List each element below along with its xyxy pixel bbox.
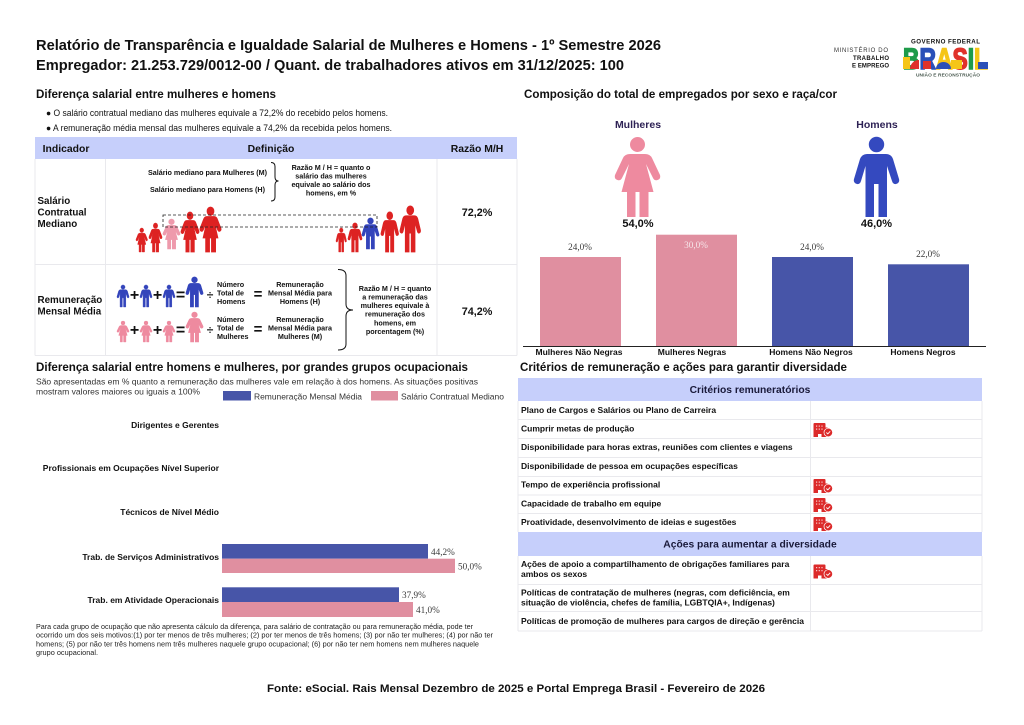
panel: ações diversidade: situação de violência, chefes de família, LGBTQIA+, Indígenas) [521, 598, 775, 608]
panel: composição homens: Homens [856, 119, 898, 131]
panel: ações diversidade: Políticas de contratação de mulheres (negras, com deficiência, em [521, 588, 790, 598]
bar chart: grupos ocupacionais: Dirigentes e Gerentes [131, 420, 219, 430]
row: remuneração mensal média: 74,2% [462, 306, 493, 318]
row: salário contratual mediano: Mediano [38, 219, 77, 230]
bullet list [46, 108, 392, 133]
bar chart: grupos ocupacionais: Trab. de Serviços Administrativos [82, 552, 219, 562]
fórmula homens: Homens [217, 297, 245, 306]
text block: explicação: São apresentadas em % quanto a remuneração das mulheres vale em relação à dos homens. As situações positivas [36, 376, 478, 386]
title: Relatório de Transparência e Igualdade Salarial de Mulheres e Homens - 1º Semestre 2026 [36, 37, 661, 54]
text block: nota de rodapé [36, 622, 494, 657]
fórmula mulheres: Mulheres (M) [278, 332, 323, 341]
bar chart: raça/cor: 24,0% [568, 242, 592, 252]
row: salário contratual mediano [38, 196, 493, 230]
heading: grandes grupos: Diferença salarial entre homens e mulheres, por grandes grupos ocupacionais [36, 360, 468, 374]
panel: critérios remuneratórios: Disponibilidade de pessoa em ocupações específicas [521, 461, 738, 471]
bar chart: grupos ocupacionais [43, 420, 482, 617]
panel: critérios remuneratórios: Capacidade de trabalho em equipe [521, 498, 662, 508]
text block: explicação: mostram valores maiores ou iguais a 100% [36, 386, 200, 396]
fórmula mulheres: + [153, 322, 162, 339]
fórmula mulheres [117, 312, 333, 342]
row: salário contratual mediano: Contratual [38, 208, 87, 218]
bar chart: raça/cor [523, 235, 986, 357]
bar chart: grupos ocupacionais: Profissionais em Ocupações Nível Superior [43, 463, 220, 473]
table header: Razão M/H [451, 144, 503, 155]
text block: nota de rodapé: Para cada grupo de ocupação que não apresenta cálculo da diferença, para salário de contratação ou para remuneração média, pode ter [36, 622, 474, 631]
table header [43, 144, 503, 155]
bar chart: raça/cor: Homens Não Negros [769, 347, 853, 357]
definição salário mediano: Salário mediano para Mulheres (M) [148, 168, 268, 177]
fórmula mulheres: = [176, 322, 185, 339]
panel: ações diversidade: Ações de apoio a compartilhamento de obrigações familiares para [521, 559, 790, 569]
fórmula homens: Número [217, 280, 245, 289]
row: salário contratual mediano: Salário [38, 196, 70, 207]
bar chart: grupos ocupacionais: 50,0% [458, 562, 482, 572]
logo: ministério e governo federal: BRASIL [903, 43, 988, 76]
bar chart: raça/cor: Mulheres Não Negras [536, 347, 623, 357]
chave e razão remuneração: remuneração dos [365, 310, 425, 318]
fórmula homens: ÷ [207, 288, 214, 302]
logo: ministério e governo federal [834, 38, 988, 78]
fórmula homens [117, 277, 333, 307]
logo: ministério e governo federal: MINISTÉRIO DO [834, 47, 888, 54]
fórmula mulheres: Mulheres [217, 332, 249, 341]
fórmula mulheres: Remuneração [276, 315, 324, 324]
bar chart: grupos ocupacionais: 41,0% [416, 605, 440, 615]
panel: critérios remuneratórios: Cumprir metas de produção [521, 424, 634, 434]
fórmula homens: + [130, 287, 139, 304]
bar chart: grupos ocupacionais: Trab. em Atividade Operacionais [88, 595, 219, 605]
bar chart: raça/cor: 22,0% [916, 249, 940, 259]
logo: ministério e governo federal: E EMPREGO [852, 64, 889, 70]
text block: nota de rodapé: homens; (5) por não ter três homens nem três mulheres naquele grupo ocupacional; (6) por não ter nem homens nem mulheres naquele [36, 640, 479, 648]
panel: composição homens [854, 119, 899, 230]
fórmula homens: + [153, 287, 162, 304]
icons: pessoas mulheres [136, 207, 221, 252]
title [36, 37, 661, 74]
panel: ações diversidade [518, 532, 982, 631]
fórmula homens: = [176, 287, 185, 304]
bar chart: grupos ocupacionais: 37,9% [402, 590, 426, 600]
panel: composição homens: 46,0% [861, 218, 892, 230]
row: remuneração mensal média: Remuneração [38, 295, 102, 306]
fonte: Fonte: eSocial. Rais Mensal Dezembro de 2025 e Portal Emprega Brasil - Fevereiro de 2026 [267, 683, 765, 695]
logo: ministério e governo federal: TRABALHO [853, 56, 889, 62]
logo: ministério e governo federal: GOVERNO FEDERAL [911, 38, 980, 46]
text block: nota de rodapé: ocorrido um dos seis motivos:(1) por ter menos de três mulheres; (2) por ter menos de três homens; (3) por não ter mulheres; (4) por não ter [36, 630, 494, 640]
fórmula mulheres: Total de [217, 324, 244, 332]
definição salário mediano [148, 162, 371, 201]
bar chart: raça/cor: 24,0% [800, 242, 824, 252]
definição salário mediano: Salário mediano para Homens (H) [150, 185, 266, 194]
fórmula mulheres: ÷ [207, 323, 214, 337]
fórmula homens: = [254, 286, 263, 303]
definição salário mediano: salário das mulheres [295, 172, 367, 180]
panel: composição mulheres [615, 119, 661, 230]
bar chart: grupos ocupacionais: Técnicos de Nível Médio [120, 507, 219, 517]
row: remuneração mensal média: Mensal Média [38, 306, 102, 318]
chave e razão remuneração: mulheres equivale à [361, 301, 430, 310]
panel: critérios remuneratórios: Disponibilidade para horas extras, reuniões com clientes e viagens [521, 442, 793, 452]
definição salário mediano: homens, em % [306, 188, 357, 198]
bar chart: grupos ocupacionais: 44,2% [431, 547, 455, 557]
fórmula mulheres: Número [217, 315, 245, 324]
table header: Definição [248, 144, 294, 155]
bullet list: ● A remuneração média mensal das mulheres equivale a 74,2% da recebida pelos homens. [46, 123, 392, 133]
table header: Indicador [43, 144, 89, 155]
fórmula homens: Total de [217, 288, 244, 298]
logo: ministério e governo federal: UNIÃO E RECONSTRUÇÃO [916, 72, 980, 78]
definição salário mediano: equivale ao salário dos [291, 180, 371, 189]
chave e razão remuneração: porcentagem (%) [366, 327, 425, 336]
chave e razão remuneração: homens, em [374, 318, 416, 328]
heading: composição: Composição do total de empregados por sexo e raça/cor [524, 87, 837, 101]
panel: critérios remuneratórios [518, 378, 982, 532]
panel: ações diversidade: ambos os sexos [521, 569, 587, 579]
panel: composição mulheres: 54,0% [622, 218, 654, 230]
title: Empregador: 21.253.729/0012-00 / Quant. de trabalhadores ativos em 31/12/2025: 100 [36, 57, 624, 74]
fórmula homens: Mensal Média para [268, 288, 333, 298]
text block: explicação [36, 376, 478, 396]
definição salário mediano: Razão M / H = quanto o [292, 163, 371, 172]
row: remuneração mensal média [38, 295, 493, 318]
heading: critérios: Critérios de remuneração e ações para garantir diversidade [520, 360, 847, 374]
heading: diferença salarial: Diferença salarial entre mulheres e homens [36, 87, 276, 101]
panel: tabela indicadores [35, 137, 517, 356]
fórmula mulheres: = [254, 321, 263, 338]
text block: nota de rodapé: grupo ocupacional. [36, 648, 98, 657]
icon: empresa com ação [814, 564, 833, 578]
legend: Salário Contratual Mediano [401, 392, 504, 402]
legend [223, 391, 504, 402]
chave e razão remuneração [338, 270, 432, 350]
fórmula mulheres: + [130, 322, 139, 339]
row: salário contratual mediano: 72,2% [462, 207, 493, 219]
panel: ações diversidade: Ações para aumentar a diversidade [663, 540, 837, 550]
panel: critérios remuneratórios: Plano de Cargos e Salários ou Plano de Carreira [521, 405, 716, 415]
panel: critérios remuneratórios: Tempo de experiência profissional [521, 480, 660, 490]
panel: ações diversidade: Políticas de promoção de mulheres para cargos de direção e gerência [521, 616, 804, 626]
panel: critérios remuneratórios: Proatividade, desenvolvimento de ideias e sugestões [521, 517, 737, 527]
fórmula homens: Homens (H) [280, 297, 321, 306]
icons: pessoas homens [336, 206, 421, 252]
fórmula homens: Remuneração [276, 280, 324, 289]
icons: empresa com critério [814, 423, 833, 531]
chave e razão remuneração: Razão M / H = quanto [359, 284, 432, 293]
panel: composição mulheres: Mulheres [615, 119, 661, 131]
legend: Remuneração Mensal Média [254, 392, 362, 402]
bar chart: raça/cor: 30,0% [684, 240, 708, 250]
panel: critérios remuneratórios: Critérios remuneratórios [690, 385, 811, 396]
bar chart: raça/cor: Mulheres Negras [658, 347, 727, 357]
bar chart: raça/cor: Homens Negros [890, 347, 956, 357]
chave e razão remuneração: a remuneração das [362, 292, 428, 302]
bullet list: ● O salário contratual mediano das mulheres equivale a 72,2% do recebido pelos homens. [46, 108, 388, 118]
fórmula mulheres: Mensal Média para [268, 324, 333, 332]
